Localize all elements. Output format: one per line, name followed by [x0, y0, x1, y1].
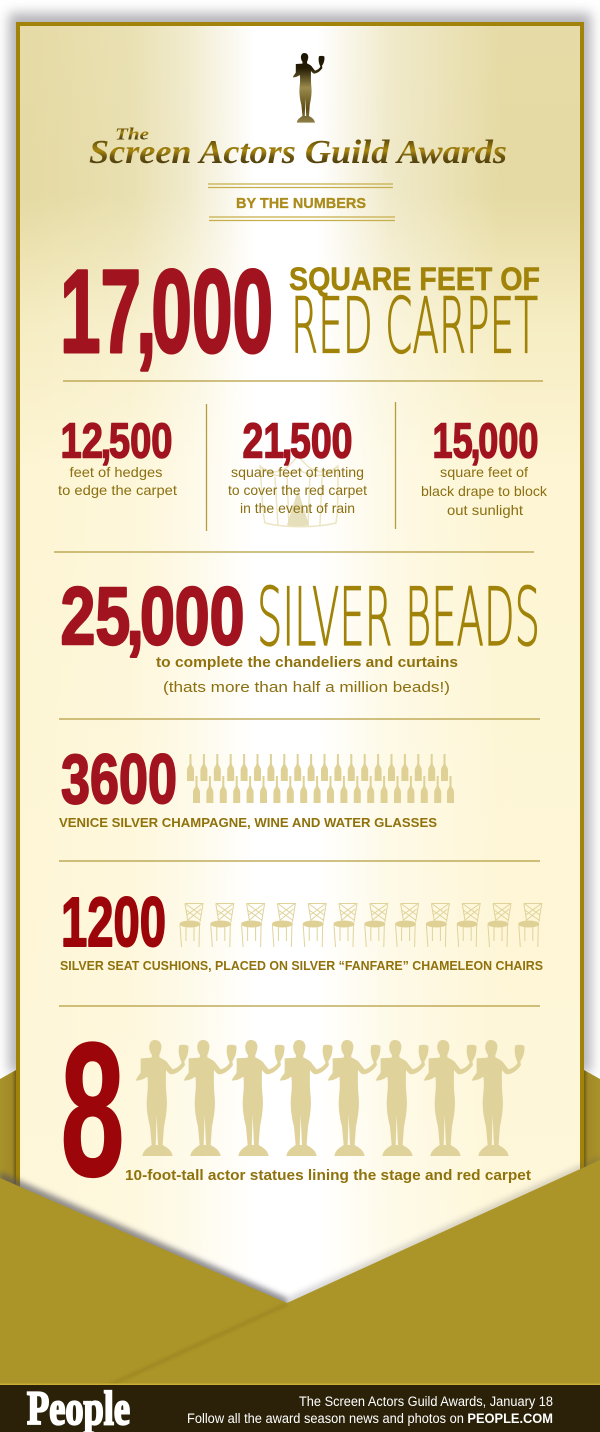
icon: actor statuette — [293, 53, 324, 123]
stat: 12,500 feet of hedges: to edge the carpet — [58, 482, 177, 498]
icon row: chairs — [180, 904, 542, 947]
title: The Screen Actors Guild Awards: Screen Actors Guild Awards — [89, 134, 507, 171]
stat: 17,000 square feet of red carpet — [60, 246, 540, 378]
stat: 21,500 square feet of tenting: square feet of tenting — [231, 464, 364, 480]
subtitle: by the numbers: BY THE NUMBERS — [236, 196, 366, 212]
stat: 1200 seat cushions: 1200 — [61, 883, 166, 961]
icon: tent — [260, 455, 338, 527]
stat: 25,000 silver beads: (thats more than half a million beads!) — [163, 679, 450, 696]
stat: 25,000 silver beads: 25,000 — [60, 571, 244, 662]
title: The Screen Actors Guild Awards: The — [115, 124, 150, 144]
stat: 15,000 square feet of black drape: square feet of — [440, 464, 528, 480]
stat: 12,500 feet of hedges: feet of hedges — [70, 464, 162, 480]
subtitle: by the numbers — [208, 184, 395, 220]
stat: 8 actor statues — [60, 1004, 531, 1216]
stat: 17,000 square feet of red carpet: SQUARE FEET OF — [289, 261, 540, 297]
footer text — [187, 1394, 553, 1426]
stat: 3600 glasses: 3600 — [61, 740, 177, 818]
stat: 15,000 square feet of black drape: black drape to block — [421, 483, 548, 499]
panel shadow — [9, 13, 591, 1073]
stat: 1200 seat cushions: SILVER SEAT CUSHIONS, PLACED ON SILVER “FANFARE” CHAMELEON CHAIRS — [60, 958, 543, 973]
stat: 12,500 feet of hedges — [58, 414, 177, 498]
envelope: front flaps — [0, 1160, 600, 1390]
stat: 15,000 square feet of black drape: 15,000 — [432, 414, 538, 468]
footer bar — [0, 1382, 600, 1432]
icon row: bottles — [187, 754, 454, 803]
stat: 8 actor statues: 10-foot-tall actor statues lining the stage and red carpet — [125, 1167, 531, 1184]
icon row: statues — [136, 1040, 524, 1156]
stat: 21,500 square feet of tenting: 21,500 — [242, 414, 352, 468]
stat: 15,000 square feet of black drape: out sunlight — [447, 502, 523, 518]
stat: 25,000 silver beads: to complete the chandeliers and curtains — [156, 655, 458, 671]
stat: 17,000 square feet of red carpet: 17,000 — [60, 246, 273, 378]
footer text: The Screen Actors Guild Awards, January 18 — [299, 1394, 553, 1409]
stat: 3600 glasses — [59, 740, 454, 830]
stat: 21,500 square feet of tenting: in the event of rain — [240, 500, 355, 516]
stat: 12,500 feet of hedges: 12,500 — [60, 414, 172, 468]
footer text: Follow all the award season news and photos on PEOPLE.COM — [187, 1411, 553, 1426]
stat: 25,000 silver beads — [60, 571, 540, 696]
envelope flap shadow — [0, 1156, 600, 1400]
stat: 3600 glasses: VENICE SILVER CHAMPAGNE, WINE AND WATER GLASSES — [59, 815, 437, 830]
envelope back flap — [0, 1070, 600, 1300]
stat: 1200 seat cushions — [60, 883, 543, 973]
stat: 8 actor statues: 8 — [60, 1004, 124, 1216]
stat: 21,500 square feet of tenting: to cover the red carpet — [228, 482, 367, 498]
stat: 15,000 square feet of black drape — [421, 414, 548, 518]
stat: 21,500 square feet of tenting — [228, 414, 367, 516]
